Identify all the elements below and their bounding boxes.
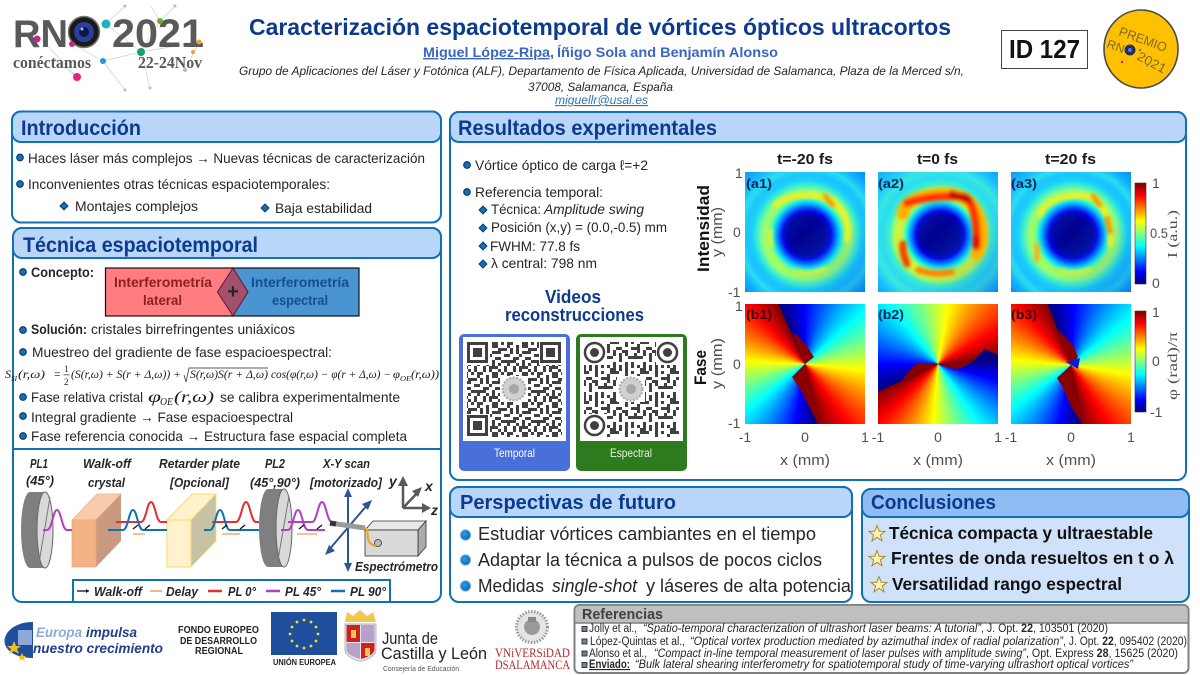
- heatmap: a3 intensity: (a3): [1011, 176, 1037, 191]
- equation: SI: [11, 374, 17, 383]
- panel: conclusiones: [862, 489, 1189, 602]
- x ticks and labels: 0: [801, 429, 809, 445]
- colorbar: phase: 1: [1152, 304, 1160, 320]
- y ticks: -1: [728, 284, 741, 300]
- equation: cos(φ(r,ω) − φ(r + Δ,ω) −: [271, 369, 391, 381]
- email: miguellr@usal.es: [555, 95, 648, 107]
- diagram: interferometría lateral + espectral: Interferometría: [114, 275, 213, 290]
- polarizer PL1: (45°): [26, 473, 54, 488]
- logo: Europa impulsa: nuestro crecimiento: [33, 640, 163, 656]
- legend: PL 0°: [228, 584, 257, 599]
- polarizer PL2: (45°,90°): [250, 475, 300, 490]
- heading: videos reconstrucciones: Videos: [545, 287, 601, 307]
- phase map: b2: (b2): [878, 307, 904, 322]
- equation: 1: [64, 364, 68, 374]
- reference 2: , J. Opt. 22, 095402 (2020): [1063, 636, 1187, 648]
- logo: Junta de Castilla y León: Consejería de Educación: [383, 664, 459, 673]
- panel: referencias: [574, 605, 1188, 673]
- retarder plate: [Opcional]: [169, 475, 230, 490]
- bullet: vórtice: Vórtice óptico de carga ℓ=+2: [475, 157, 648, 173]
- logo: Europa impulsa: impulsa: [86, 624, 137, 640]
- colorbar: phase: -1: [1150, 404, 1163, 420]
- x ticks and labels: 1: [994, 429, 1002, 445]
- legend: PL 90°: [350, 584, 387, 599]
- authors: Íñigo Sola and Benjamín Alonso: [557, 44, 778, 60]
- equation: 2: [64, 377, 68, 387]
- bullet: fase relativa: se calibra experimentalmente: [220, 389, 400, 405]
- x ticks and labels: x (mm): [913, 452, 963, 469]
- pulses and beams: [43, 502, 332, 534]
- bullets: referencia temporal: FWHM: 77.8 fs: [490, 238, 580, 254]
- x ticks and labels: x (mm): [1046, 452, 1096, 469]
- equation: OE: [400, 374, 411, 383]
- polarizer PL1: [21, 456, 54, 568]
- bullet: solución: cristales birrefringentes uniáxicos: [91, 321, 295, 337]
- bullet: fase relativa: OE: [160, 397, 173, 408]
- fiber and spectrometer: [330, 521, 438, 574]
- x ticks and labels: 0: [1067, 429, 1075, 445]
- x ticks and labels: -1: [739, 429, 751, 445]
- header: perspectivas: Perspectivas de futuro: [460, 492, 676, 514]
- bullets: referencia temporal: Amplitude swing: [543, 201, 644, 217]
- equation: (r,ω): [18, 369, 45, 381]
- row label: intensidad: y (mm): [709, 207, 726, 257]
- QR card: espectral: Espectral: [610, 446, 652, 460]
- y ticks: 0: [733, 356, 741, 372]
- row label: intensidad: [694, 185, 726, 272]
- phase map: b3: [1011, 304, 1131, 424]
- diagram: experimental setup: X-Y scan: [322, 456, 370, 471]
- equation: φ: [393, 369, 401, 381]
- header: perspectivas: [450, 487, 852, 517]
- crystal walk-off: [72, 456, 133, 567]
- bullet: fase relativa: φ: [148, 389, 161, 406]
- header: introducción: [12, 112, 441, 142]
- logo: Junta de Castilla y León: Junta de: [382, 629, 438, 648]
- logo: Universidad de Salamanca: VNiVERSiDAD: [495, 646, 570, 660]
- equation: =: [54, 369, 60, 381]
- item: medidas single-shot: single-shot: [552, 576, 638, 596]
- phase map: b3: (b3): [1011, 307, 1037, 322]
- diagram: experimental setup: [motorizado]: [309, 475, 383, 490]
- authors: [423, 44, 778, 60]
- header: resultados: Resultados experimentales: [458, 117, 717, 140]
- x ticks and labels: [739, 429, 1135, 469]
- panel: técnica espaciotemporal: [5, 228, 441, 602]
- equation: (r,ω)): [411, 369, 439, 381]
- reference 1: “Spatio-temporal characterization of ultrashort laser beams: A tutorial”: [643, 623, 982, 635]
- bullets: referencia temporal: Técnica:: [491, 201, 541, 217]
- text: fondo europeo: [178, 625, 259, 657]
- colorbar: intensity: 1: [1152, 175, 1160, 191]
- colorbar: phase: φ (rad)/π: [1166, 332, 1181, 400]
- reference 2: “Optical vortex production mediated by azimuthal index of radial polarization”: [690, 636, 1064, 648]
- QR card: espectral: [576, 334, 687, 471]
- QR card: temporal: Temporal: [494, 446, 535, 460]
- header: técnica espaciotemporal: Técnica espaciotemporal: [23, 234, 258, 257]
- polarizer PL2: [250, 456, 300, 567]
- bullet: integral gradiente: Integral gradiente → Fase espacioespectral: [31, 409, 293, 425]
- logo: RNO 2021 conectamos: conéctamos: [13, 53, 91, 72]
- row label: fase: [691, 338, 726, 389]
- coordinate axes: y: [388, 473, 398, 489]
- equation: (S(r,ω) + S(r + Δ,ω)) +: [71, 369, 181, 381]
- panel: introducción: [12, 112, 441, 222]
- reference 1: , J. Opt. 22, 103501 (2020): [981, 623, 1108, 635]
- bullet: solución: Solución:: [31, 321, 87, 337]
- item: medidas single-shot: [460, 576, 852, 596]
- fiber and spectrometer: Espectrómetro: [355, 559, 438, 574]
- heading: videos reconstrucciones: [505, 287, 644, 325]
- diagram: interferometría lateral + espectral: lateral: [143, 293, 182, 308]
- reference 1: Jolly et al.,: [589, 623, 637, 635]
- colorbar: intensity: [1135, 175, 1181, 291]
- bullet text: inconvenientes: Inconvenientes otras técnicas espaciotemporales:: [28, 176, 330, 192]
- sub-bullet: baja estabilidad: Baja estabilidad: [275, 200, 372, 216]
- logo: RNO 2021 conectamos: RN: [13, 13, 68, 56]
- coordinate axes: z: [430, 502, 438, 518]
- heatmap: a2 intensity: [878, 172, 998, 292]
- coordinate axes: [388, 473, 438, 518]
- x ticks and labels: 1: [1127, 429, 1135, 445]
- affiliation: 37008, Salamanca, España: [528, 80, 673, 94]
- heatmap: a1 intensity: (a1): [746, 176, 772, 191]
- bullet: concepto: Concepto:: [31, 264, 94, 280]
- crystal walk-off: crystal: [88, 475, 125, 490]
- badge: premio RNO 2021: RN: [1105, 37, 1127, 56]
- item: adaptar técnica: Adaptar la técnica a pulsos de pocos ciclos: [478, 550, 822, 570]
- logo: Junta de Castilla y León: Castilla y León: [381, 644, 487, 663]
- text: fondo europeo: FONDO EUROPEO: [178, 625, 259, 636]
- legend: Delay: [166, 584, 199, 599]
- polarizer PL1: PL1: [30, 456, 48, 471]
- logo: Universidad de Salamanca: DSALAMANCA: [495, 658, 570, 672]
- reference 2: [582, 636, 1187, 648]
- logo: Universidad de Salamanca: [495, 612, 570, 672]
- scan axes arrows: [325, 488, 372, 572]
- sub-bullet: montajes complejos: Montajes complejos: [75, 198, 198, 214]
- reference 1: [582, 623, 1108, 635]
- text: fondo europeo: DE DESARROLLO: [180, 636, 257, 647]
- badge: premio RNO 2021: PREMIO: [1117, 24, 1169, 55]
- colorbar: intensity: 0: [1152, 275, 1160, 291]
- crystal walk-off: Walk-off: [83, 456, 133, 471]
- header: referencias: [574, 605, 1188, 623]
- bullet text: haces láser: Haces láser más complejos → Nuevas técnicas de caracterización: [28, 150, 425, 166]
- y ticks: 0: [733, 224, 741, 240]
- affiliation: [239, 64, 964, 94]
- logo: EU flag: UNIÓN EUROPEA: [273, 658, 336, 667]
- bullet: fase relativa: (r,ω): [174, 389, 214, 406]
- colorbar: phase: [1135, 304, 1181, 420]
- heatmap: a3 intensity: [1011, 172, 1131, 292]
- heatmap: a2 intensity: (a2): [878, 176, 904, 191]
- colorbar: intensity: 0.5: [1150, 225, 1168, 241]
- row label: intensidad: Intensidad: [694, 185, 713, 272]
- retarder plate: [159, 456, 240, 567]
- legend: PL 45°: [285, 584, 322, 599]
- legend: Walk-off: [94, 584, 144, 599]
- panel: resultados experimentales: [450, 112, 1186, 480]
- header: referencias: Referencias: [582, 606, 663, 623]
- column titles: t=20 fs: [1045, 151, 1096, 168]
- reference 3: [582, 648, 1178, 660]
- badge: premio RNO 2021: 2021: [1135, 48, 1169, 76]
- legend: [73, 580, 390, 602]
- x ticks and labels: x (mm): [780, 452, 830, 469]
- equation: [5, 364, 439, 387]
- bullet: fase relativa: Fase relativa cristal: [31, 389, 143, 405]
- logo: RNO 2021 conectamos: 22-24Nov: [138, 53, 202, 72]
- bullet: fase relativa: [20, 389, 400, 408]
- item: versatilidad: Versatilidad rango espectral: [892, 574, 1122, 594]
- header: conclusiones: [862, 489, 1189, 517]
- title: Caracterización espaciotemporal de vórtices ópticos ultracortos: [249, 14, 951, 40]
- QR card: temporal: [459, 334, 570, 471]
- phase map: b1: [745, 304, 865, 424]
- diagram: interferometría lateral + espectral: Interferometría: [251, 275, 350, 290]
- item: técnica compacta: Técnica compacta y ultraestable: [889, 523, 1153, 543]
- header: técnica espaciotemporal: [13, 228, 441, 258]
- logo: RNO 2021 conectamos: 2021: [112, 12, 204, 56]
- reference 3: “Compact in-line temporal measurement of laser pulses with amplitude swing”: [654, 648, 1027, 660]
- heatmap: a1 intensity: [745, 172, 865, 292]
- x ticks and labels: -1: [1005, 429, 1017, 445]
- reference 4: Enviado:: [589, 659, 630, 671]
- column titles: t=-20 fs: [777, 151, 833, 168]
- coordinate axes: x: [424, 478, 434, 494]
- badge: premio RNO 2021: [1104, 10, 1178, 88]
- header: resultados: [450, 112, 1186, 142]
- heading: videos reconstrucciones: reconstrucciones: [505, 305, 644, 325]
- colorbar: intensity: I (a.u.): [1166, 210, 1181, 258]
- colorbar: phase: 0: [1152, 353, 1160, 369]
- affiliation: Grupo de Aplicaciones del Láser y Fotónica (ALF), Departamento de Física Aplicada, Universidad de Salamanca, Plaza de la Merced s/n,: [239, 64, 964, 78]
- logo: Europa impulsa: Europa: [36, 624, 82, 640]
- x ticks and labels: 1: [861, 429, 869, 445]
- logo: EU flag: [271, 612, 337, 667]
- text: fondo europeo: REGIONAL: [195, 646, 243, 657]
- logo: Junta de Castilla y León: [345, 610, 487, 673]
- bullets: referencia temporal: Referencia temporal:: [475, 184, 603, 200]
- bullet: fase referencia: Fase referencia conocida → Estructura fase espacial completa: [31, 428, 407, 444]
- column titles: [777, 151, 1096, 168]
- item: estudiar vórtices: Estudiar vórtices cambiantes en el tiempo: [478, 524, 816, 544]
- ID box: ID 127: [1009, 34, 1080, 64]
- logo: Europa impulsa: [4, 622, 163, 661]
- equation: S(r,ω)S(r + Δ,ω): [190, 369, 268, 381]
- phase map: b1: (b1): [746, 307, 772, 322]
- authors: Miguel López-Ripa,: [423, 44, 554, 60]
- diagram: interferometría lateral + espectral: espectral: [272, 293, 328, 308]
- reference 3: Alonso et al.,: [589, 648, 647, 660]
- phase map: b2: [878, 304, 998, 424]
- column titles: t=0 fs: [917, 151, 958, 168]
- diagram: interferometría lateral + espectral: [106, 268, 359, 316]
- x ticks and labels: 0: [934, 429, 942, 445]
- row label: fase: y (mm): [709, 338, 726, 389]
- logo: RNO 2021 conectamos: [13, 4, 204, 92]
- bullets: referencia temporal: [464, 184, 667, 271]
- y ticks: 1: [735, 165, 743, 181]
- reference 2: López-Quintas et al.,: [590, 636, 685, 648]
- x ticks and labels: -1: [872, 429, 884, 445]
- item: medidas single-shot: Medidas: [478, 576, 544, 596]
- item: frentes de onda: Frentes de onda resueltos en t o λ: [891, 548, 1174, 568]
- diagram: experimental setup: [21, 456, 438, 602]
- y ticks: [728, 165, 743, 431]
- y ticks: -1: [728, 415, 741, 431]
- item: medidas single-shot: y láseres de alta potencia: [646, 576, 852, 596]
- diagram: interferometría lateral + espectral: +: [227, 281, 239, 303]
- retarder plate: Retarder plate: [159, 456, 240, 471]
- row label: fase: Fase: [691, 350, 710, 385]
- polarizer PL2: PL2: [265, 456, 286, 471]
- equation: S: [5, 369, 11, 381]
- bullets: referencia temporal: Posición (x,y) = (0.0,-0.5) mm: [491, 219, 667, 235]
- y ticks: 1: [735, 298, 743, 314]
- bullet: muestreo: Muestreo del gradiente de fase espacioespectral:: [32, 344, 332, 360]
- panel: perspectivas de futuro: [450, 487, 852, 602]
- reference 4: “Bulk lateral shearing interferometry for spatiotemporal study of time-varying ultrashort optical vortices”: [635, 659, 1134, 671]
- bullets: referencia temporal: λ central: 798 nm: [491, 255, 597, 271]
- header: conclusiones: Conclusiones: [871, 492, 996, 514]
- reference 3: , Opt. Express 28, 15625 (2020): [1026, 648, 1178, 660]
- header: introducción: Introducción: [21, 117, 141, 140]
